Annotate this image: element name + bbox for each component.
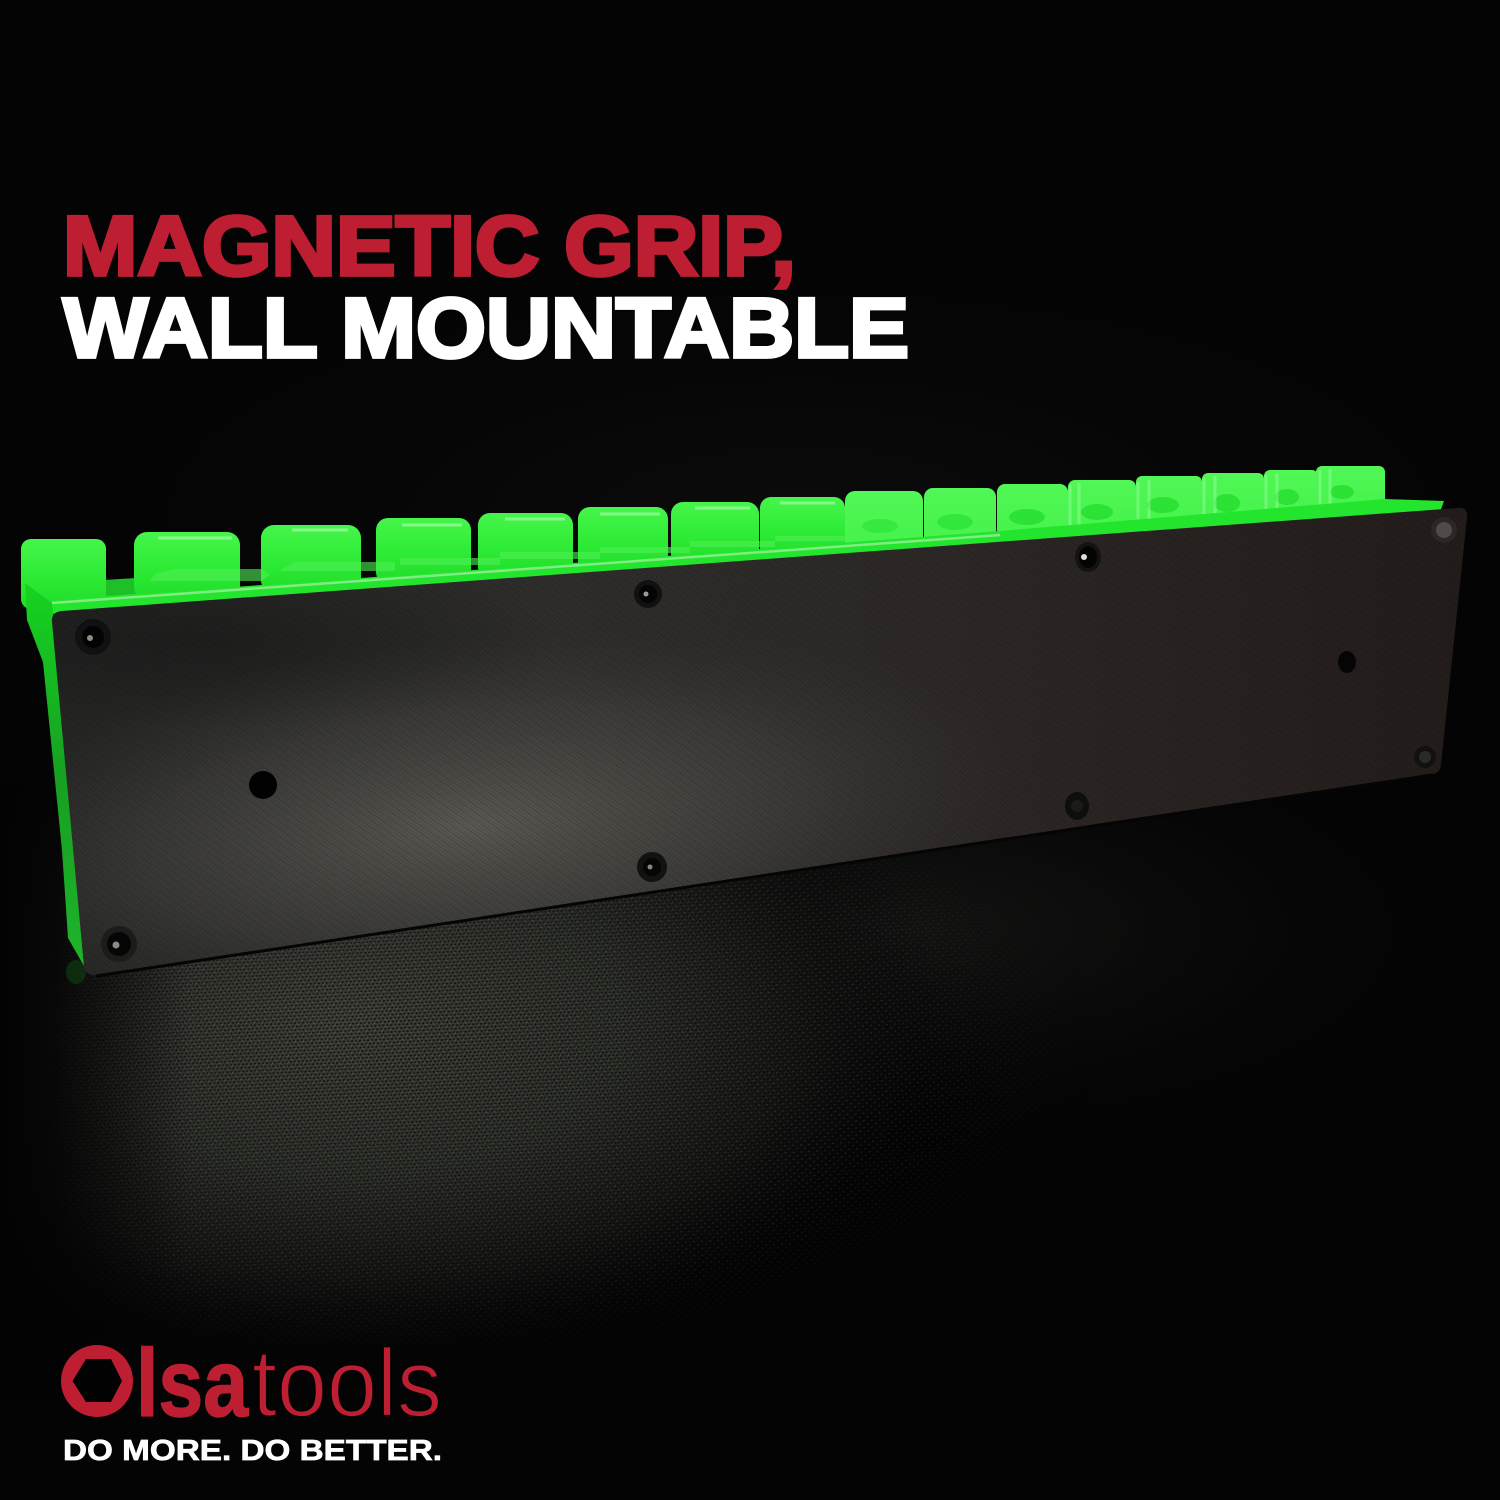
background: black textured surface [34,427,1229,1354]
green base strip [50,499,1444,614]
product: socket holder rail [21,466,1480,990]
green side wall [25,583,84,966]
logo wordmark light part: tools [252,1330,442,1437]
green knobs row [21,466,1385,609]
screws and mounting holes [75,517,1457,962]
translucent base behind knobs [104,578,136,602]
panel shadow line [96,775,1432,976]
heading line: magnetic grip: MAGNETIC GRIP, [63,199,796,293]
logo: Olsatools [61,1330,442,1467]
heading line: wall mountable: WALL MOUNTABLE [63,281,909,375]
back plate panel [40,490,1480,990]
tagline: DO MORE. DO BETTER. [63,1435,442,1467]
logo wordmark bold part: lsa [136,1330,249,1437]
logo mark: O with hexagon [61,1345,133,1417]
title [63,199,909,375]
knob highlights and ribs [150,469,1354,581]
